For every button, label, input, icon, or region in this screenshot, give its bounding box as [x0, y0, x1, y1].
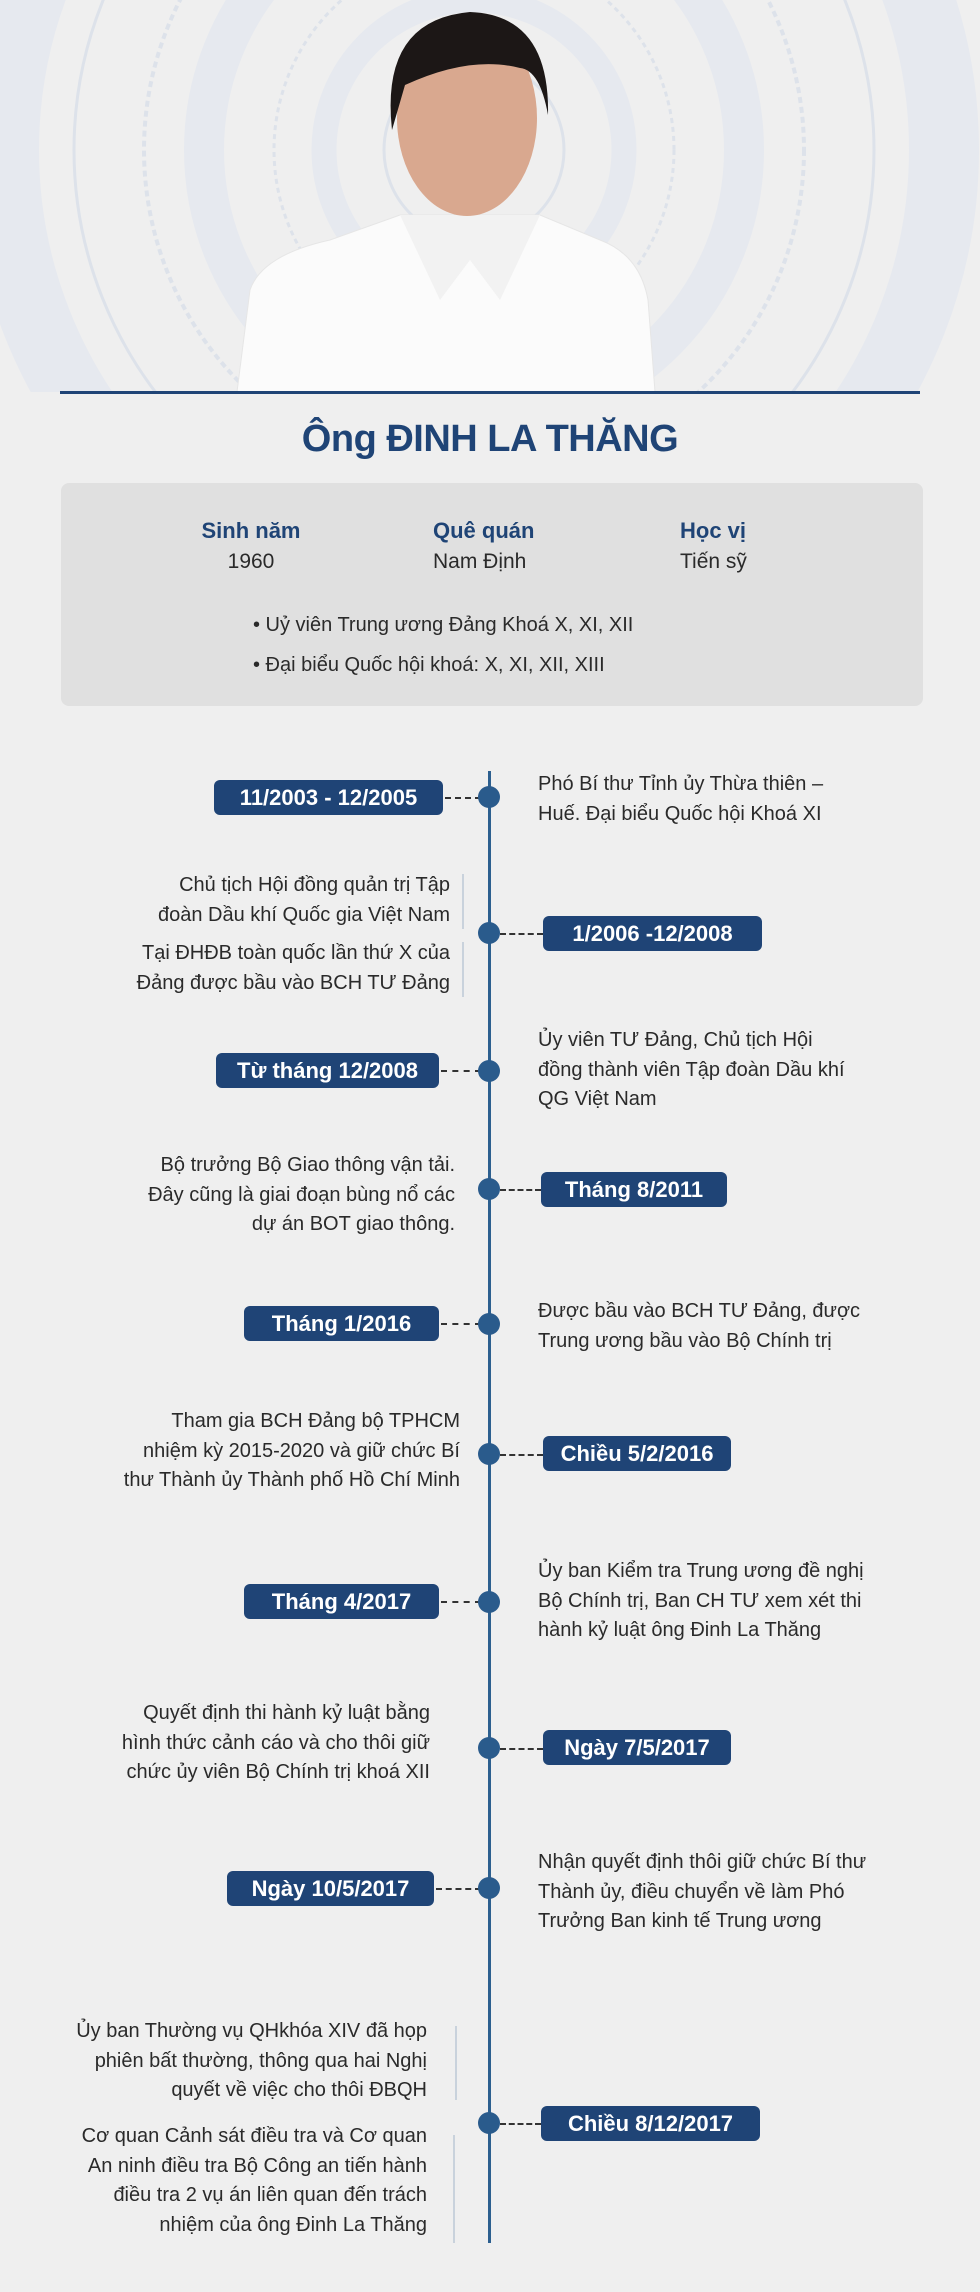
event 9: Ngày 10/5/2017 [252, 1876, 409, 1901]
event 8: Quyết định thi hành kỷ luật bằng [143, 1702, 430, 1724]
birth year [201, 518, 300, 573]
event 8: Ngày 7/5/2017 [564, 1735, 710, 1760]
birth year: Sinh năm [201, 518, 300, 543]
event 3 [216, 1028, 845, 1110]
panel: profile [61, 483, 923, 706]
event 9 [227, 1851, 866, 1932]
drum pattern background [4, 0, 944, 620]
event 10: phiên bất thường, thông qua hai Nghị [95, 2050, 427, 2072]
event 5: Tháng 1/2016 [272, 1311, 411, 1336]
event 6: Tham gia BCH Đảng bộ TPHCM [171, 1410, 460, 1432]
event 2: 1/2006 -12/2008 [572, 921, 733, 946]
event 4: Đây cũng là giai đoạn bùng nổ các [148, 1184, 455, 1206]
event 2: Đảng được bầu vào BCH TƯ Đảng [137, 972, 450, 994]
event 2: Tại ĐHĐB toàn quốc lần thứ X của [142, 942, 450, 964]
event 5: Trung ương bầu vào Bộ Chính trị [538, 1330, 832, 1352]
hometown [433, 518, 534, 573]
event 3: Từ tháng 12/2008 [237, 1058, 418, 1083]
header photo area [0, 0, 979, 392]
header divider [60, 391, 920, 394]
event 8: hình thức cảnh cáo và cho thôi giữ [122, 1732, 430, 1754]
icon: portrait [237, 12, 655, 392]
event 10: điều tra 2 vụ án liên quan đến trách [113, 2184, 427, 2206]
event 4: Bộ trưởng Bộ Giao thông vận tải. [161, 1154, 455, 1176]
event 4: Tháng 8/2011 [565, 1177, 703, 1202]
event 9: Nhận quyết định thôi giữ chức Bí thư [538, 1851, 866, 1873]
birth year: 1960 [228, 550, 274, 573]
event 10: Cơ quan Cảnh sát điều tra và Cơ quan [82, 2125, 427, 2147]
event 10: quyết về việc cho thôi ĐBQH [171, 2079, 427, 2101]
event 7 [244, 1558, 864, 1641]
hometown: Quê quán [433, 518, 534, 543]
event 5 [244, 1300, 860, 1352]
event 5: Được bầu vào BCH TƯ Đảng, được [538, 1300, 860, 1322]
event 4: dự án BOT giao thông. [252, 1213, 455, 1235]
event 6: thư Thành ủy Thành phố Hồ Chí Minh [124, 1469, 460, 1491]
degree: Tiến sỹ [680, 550, 747, 573]
event 9: Trưởng Ban kinh tế Trung ương [538, 1910, 822, 1932]
event 6 [124, 1410, 731, 1491]
event 8 [122, 1701, 731, 1783]
event 7: hành kỷ luật ông Đinh La Thăng [538, 1619, 821, 1641]
event 1: Huế. Đại biểu Quốc hội Khoá XI [538, 802, 822, 824]
event 3: QG Việt Nam [538, 1088, 657, 1110]
event 4 [148, 1154, 727, 1235]
event 10: Chiều 8/12/2017 [568, 2111, 733, 2136]
event 2: Chủ tịch Hội đồng quản trị Tập [179, 874, 450, 896]
timeline line [488, 771, 491, 2243]
title: Ông ĐINH LA THĂNG [302, 418, 678, 460]
event 3: Ủy viên TƯ Đảng, Chủ tịch Hội [538, 1029, 813, 1051]
event 2 [136, 874, 762, 997]
degree: Học vị [680, 518, 746, 543]
event 10 [76, 2018, 760, 2243]
event 1: 11/2003 - 12/2005 [240, 785, 417, 810]
hometown: Nam Định [433, 550, 526, 573]
event 1 [214, 773, 824, 824]
event 3: đồng thành viên Tập đoàn Dầu khí [538, 1058, 845, 1080]
event 7: Tháng 4/2017 [272, 1589, 411, 1614]
event 1: Phó Bí thư Tỉnh ủy Thừa thiên – [538, 773, 823, 795]
event 2: đoàn Dầu khí Quốc gia Việt Nam [158, 904, 450, 926]
event 8: chức ủy viên Bộ Chính trị khoá XII [126, 1761, 430, 1783]
event 9: Thành ủy, điều chuyển về làm Phó [538, 1880, 844, 1902]
bullet list [253, 614, 633, 676]
event 7: Ủy ban Kiểm tra Trung ương đề nghị [538, 1560, 864, 1582]
bullet list: • Đại biểu Quốc hội khoá: X, XI, XII, XIII [253, 654, 605, 676]
bullet list: • Uỷ viên Trung ương Đảng Khoá X, XI, XII [253, 614, 633, 636]
event 7: Bộ Chính trị, Ban CH TƯ xem xét thi [538, 1590, 862, 1612]
event 10: nhiệm của ông Đinh La Thăng [159, 2214, 427, 2236]
degree [680, 518, 747, 573]
event 10: An ninh điều tra Bộ Công an tiến hành [88, 2154, 427, 2176]
event 6: Chiều 5/2/2016 [561, 1441, 713, 1466]
event 10: Ủy ban Thường vụ QHkhóa XIV đã họp [76, 2020, 427, 2042]
event 6: nhiệm kỳ 2015-2020 và giữ chức Bí [143, 1440, 460, 1462]
